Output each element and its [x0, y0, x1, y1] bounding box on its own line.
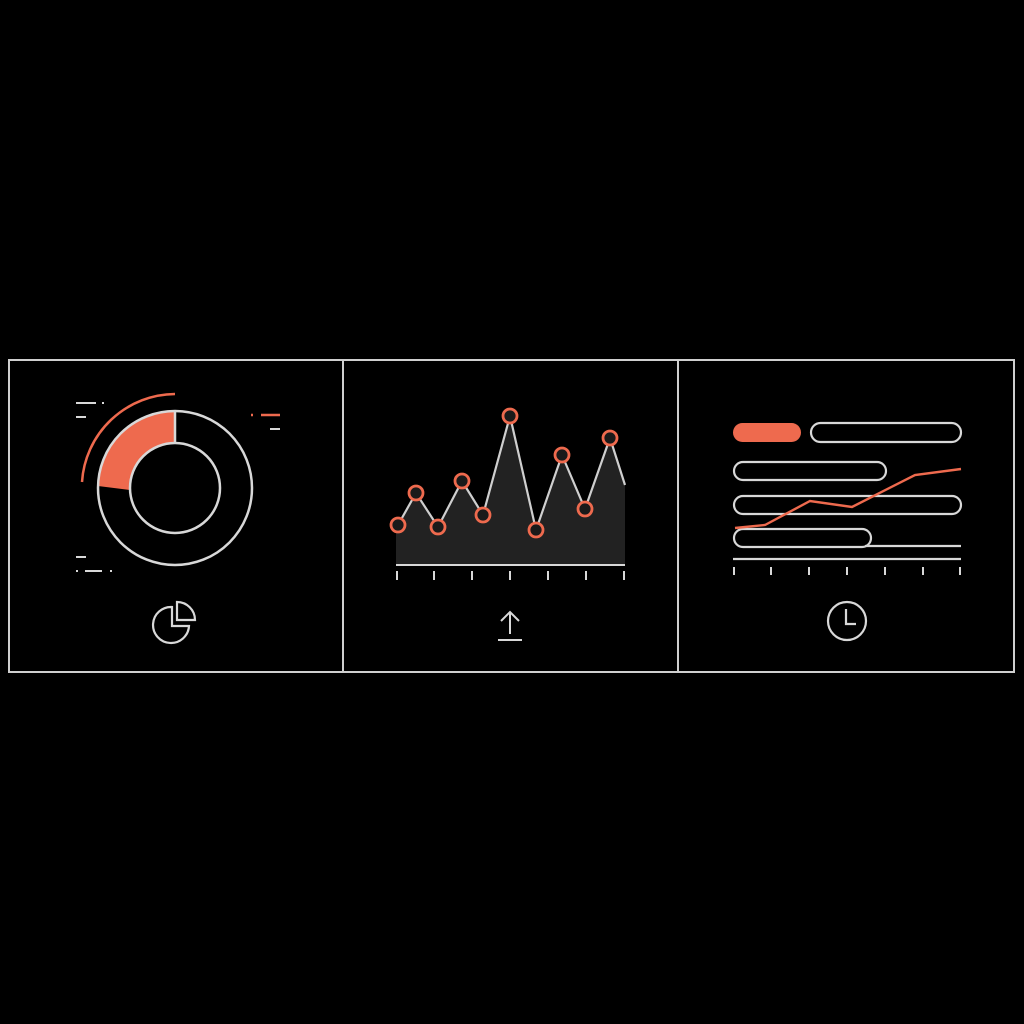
- orange pill: [733, 423, 801, 442]
- icon: pie chart: [153, 602, 195, 643]
- panel: donut chart: [76, 394, 280, 643]
- axis: [396, 565, 625, 580]
- panels frame: [9, 360, 1014, 672]
- area fill: [396, 416, 625, 565]
- donut orange segment: [98, 411, 175, 490]
- donut rings: [98, 411, 252, 565]
- panel: timeline bars: [733, 423, 961, 640]
- outline pills: [733, 423, 961, 559]
- icon: upload arrow: [498, 612, 522, 640]
- orange outer arc: [82, 394, 175, 482]
- panel: line chart: [391, 409, 625, 640]
- legend dashes: [76, 403, 280, 571]
- icon: clock: [828, 602, 866, 640]
- ticks: [734, 567, 960, 575]
- data points: [391, 409, 617, 537]
- orange trend line: [735, 469, 961, 528]
